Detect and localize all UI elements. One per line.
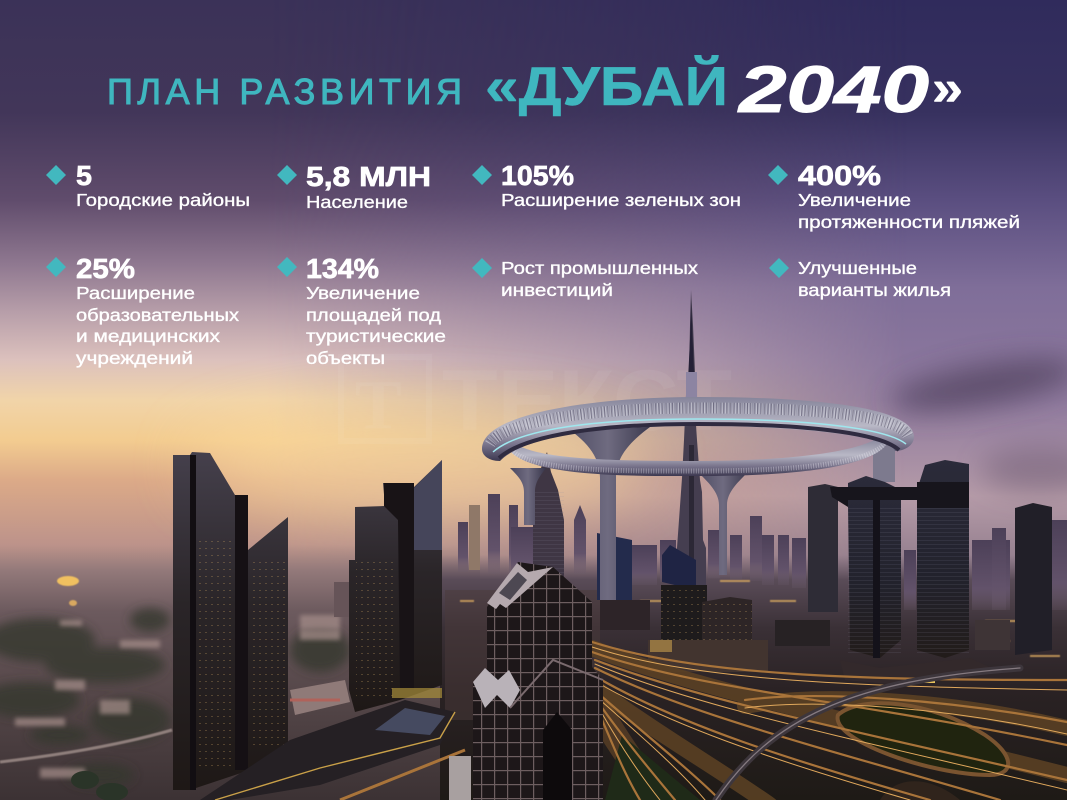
elevated monorail bbox=[716, 668, 1020, 800]
tower C bbox=[808, 484, 838, 612]
stat: green zones bbox=[472, 160, 741, 210]
stat: districts: Городские районы bbox=[76, 190, 250, 210]
stat: beaches bbox=[768, 160, 1020, 232]
title: 2040: 2040 bbox=[736, 52, 929, 126]
stat: education and medicine bbox=[46, 253, 239, 368]
stat: education and medicine: образовательных bbox=[76, 305, 239, 325]
background sky bbox=[0, 0, 1067, 578]
road beds bbox=[592, 648, 1067, 800]
stat: beaches: 400% bbox=[798, 160, 881, 191]
ring structure with pillars bbox=[482, 397, 914, 600]
stat: districts bbox=[46, 160, 250, 210]
tower spire near ring bbox=[533, 452, 564, 578]
stat: tourism: туристические bbox=[306, 326, 446, 346]
stat: districts: 5 bbox=[76, 160, 92, 191]
icon: diamond bbox=[768, 165, 788, 185]
stat: industrial investment: Рост промышленных bbox=[501, 258, 698, 278]
stat: tourism: площадей под bbox=[306, 305, 441, 325]
icon: diamond bbox=[472, 165, 492, 185]
icon: diamond bbox=[472, 258, 492, 278]
stat: tourism: 134% bbox=[306, 253, 379, 284]
pillars bbox=[510, 424, 895, 600]
stat: green zones: Расширение зеленых зон bbox=[501, 190, 741, 210]
stat: industrial investment bbox=[472, 258, 698, 300]
sky bridge bbox=[830, 482, 969, 508]
stat: population bbox=[277, 161, 431, 212]
stat: green zones: 105% bbox=[501, 160, 574, 191]
watermark: ТЕКСТ bbox=[442, 353, 732, 449]
tower B bbox=[917, 460, 969, 658]
title: closing quote: » bbox=[932, 60, 963, 116]
icon: diamond bbox=[277, 257, 297, 277]
highway interchange bbox=[592, 642, 1067, 800]
tower D bbox=[1015, 503, 1052, 655]
stat: tourism: объекты bbox=[306, 348, 385, 368]
Burj Khalifa tower bbox=[675, 290, 706, 590]
stat: housing bbox=[769, 258, 951, 300]
ground: right district bbox=[440, 555, 1067, 800]
stat: education and medicine: учреждений bbox=[76, 348, 193, 368]
stat: housing: Улучшенные bbox=[798, 258, 917, 278]
ground: left district bbox=[0, 545, 480, 800]
icon: diamond bbox=[46, 257, 66, 277]
title: Dubai: «ДУБАЙ bbox=[485, 54, 728, 117]
stat: education and medicine: и медицинских bbox=[76, 326, 220, 346]
stat: tourism bbox=[277, 253, 446, 368]
green island bbox=[838, 703, 1008, 775]
icon: diamond bbox=[277, 165, 297, 185]
front faceted tower bbox=[473, 562, 603, 800]
mid-rise block buildings bbox=[600, 585, 1010, 685]
stat: population: Население bbox=[306, 192, 408, 212]
stat: industrial investment: инвестиций bbox=[501, 280, 613, 300]
watermark: Т bbox=[355, 367, 402, 444]
lower ring bbox=[508, 438, 888, 476]
title: plan: ПЛАН РАЗВИТИЯ bbox=[107, 71, 462, 112]
stat: education and medicine: Расширение bbox=[76, 283, 195, 303]
tower A bbox=[848, 476, 901, 658]
stat: population: 5,8 МЛН bbox=[306, 161, 431, 192]
left twin skyscraper bbox=[173, 452, 288, 790]
stat: housing: варианты жилья bbox=[798, 280, 951, 300]
upper ring bbox=[482, 397, 914, 461]
stat: tourism: Увеличение bbox=[306, 283, 420, 303]
right twin towers with bridge bbox=[808, 460, 1052, 658]
blue glass tower bbox=[597, 533, 696, 600]
distant skyline bbox=[458, 494, 1067, 610]
icon: diamond bbox=[46, 165, 66, 185]
stat: education and medicine: 25% bbox=[76, 253, 135, 284]
central twin skyscraper bbox=[349, 460, 442, 712]
podium and waterfront road bbox=[200, 680, 471, 800]
icon: diamond bbox=[769, 258, 789, 278]
title bbox=[107, 52, 963, 126]
watermark bbox=[338, 353, 732, 449]
stat: beaches: Увеличение bbox=[798, 190, 911, 210]
stat: beaches: протяженности пляжей bbox=[798, 212, 1020, 232]
